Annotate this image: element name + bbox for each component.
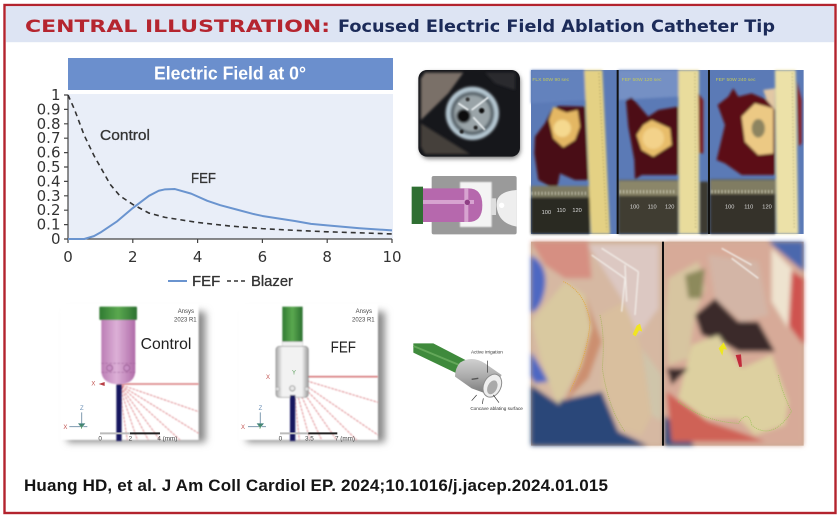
y axis labels: 1 [51,86,60,104]
y axis labels: 0.1 [37,216,60,234]
software label: 2023 R1 [174,318,197,324]
x axis labels [63,248,402,266]
FEF label: FEF [191,170,216,187]
ruler numbers: 100 [630,204,639,210]
axes triad: X [91,382,95,388]
lesion captions [532,77,756,83]
panel: control simulation [60,303,206,442]
chart heading [68,58,393,90]
FEF curve [68,189,392,239]
legend: FEF [192,273,220,290]
scale bar [98,433,177,442]
scale bar [279,433,355,442]
label: concave ablating surface: Concave ablating surface [470,406,523,411]
axes triad: Y [79,425,83,431]
header band [6,6,834,42]
scale bar: 4 (mm) [157,435,177,442]
y axis labels: 0.2 [37,201,60,219]
y axis labels: 0.6 [37,144,60,162]
scale bar: 7 (mm) [335,435,355,442]
x axis labels: 0 [63,248,73,266]
ruler numbers [542,204,772,216]
axes triad: Z [259,406,263,412]
y axis labels: 0.9 [37,100,60,118]
axes triad: X [63,425,67,431]
ruler numbers: 120 [665,204,674,210]
field lines [119,384,199,440]
chart heading: Electric Field at 0° [154,64,306,84]
axes triad: Y [258,425,262,431]
legend [168,273,293,290]
axes triad: Y [292,370,296,376]
lesion 2 [626,97,678,179]
axes triad: Z [80,406,84,412]
panel: FEF simulation [238,303,385,442]
software label: 2023 R1 [352,318,375,324]
photo: catheter tip face [418,70,520,159]
lesion outlines [563,282,792,432]
y axis labels: 0.4 [37,172,60,190]
y axis labels: 0.7 [37,129,60,147]
ruler numbers: 120 [762,204,772,210]
control curve [68,95,392,234]
x axis labels: 8 [322,248,332,266]
software label [174,309,197,324]
chart: electric field at 0 degrees [37,58,402,290]
axes triad [241,370,296,431]
citation: Huang HD, et al. J Am Coll Cardiol EP. 2024;10.1016/j.jacep.2024.01.015 [24,476,608,495]
control label: Control [100,127,150,144]
catheter tip [99,307,137,441]
ruler numbers: 110 [744,204,753,210]
ruler numbers: 120 [572,208,582,214]
lesion captions: FLX 50W 90 sec [532,77,570,83]
x axis labels: 10 [382,248,402,266]
diagram: catheter with labels [413,343,523,411]
scale bar: 0 [98,435,102,442]
FEF text: FEF [331,339,356,356]
photo: gross lesions [531,70,804,234]
ruler numbers: 110 [648,204,657,210]
x axis labels: 6 [258,248,267,266]
ruler numbers: 100 [725,204,734,210]
software label [352,309,375,324]
arrow: yellow [719,342,727,356]
label: active irrigation: Active irrigation [471,349,503,354]
axes triad: X [266,375,270,381]
right specimen [664,242,804,446]
x axis labels: 2 [128,248,138,266]
y axis labels: 0.5 [37,158,60,176]
photo: endocardial view [531,242,804,446]
lesion captions: FEF 50W 240 sec [716,77,756,83]
tissue strands [592,248,758,315]
arrow: yellow [633,324,642,336]
axes triad [63,382,95,431]
left specimen [531,242,663,446]
title: subject: Focused Electric Field Ablation Catheter Tip [338,17,775,37]
lesion 1 [534,106,588,190]
software label: Ansys [356,309,372,315]
field lines [293,377,378,440]
ruler ticks [532,73,794,230]
y axis labels: 0 [51,230,60,248]
lesion captions: FEF 50W 120 sec [622,77,662,83]
y axis labels [37,86,60,248]
software label: Ansys [178,309,194,315]
scale bar: 0 [279,435,283,442]
scale bar: 2 [129,435,133,442]
catheter tip [276,307,309,441]
ruler numbers: 110 [557,208,566,214]
arrow: red [736,354,742,367]
x axis labels: 4 [193,248,202,266]
lesion 3 [717,88,775,175]
scale bar: 3.5 [305,435,314,442]
y axis labels: 0.8 [37,115,60,133]
axes triad: X [241,425,245,431]
control text: Control [141,336,191,353]
y axis labels: 0.3 [37,187,60,205]
title: central illustration label: CENTRAL ILLUSTRATION: [25,17,330,37]
ruler numbers: 100 [542,210,551,216]
diagram: tip cross-section overlay [412,176,517,234]
legend: Blazer [251,273,293,290]
